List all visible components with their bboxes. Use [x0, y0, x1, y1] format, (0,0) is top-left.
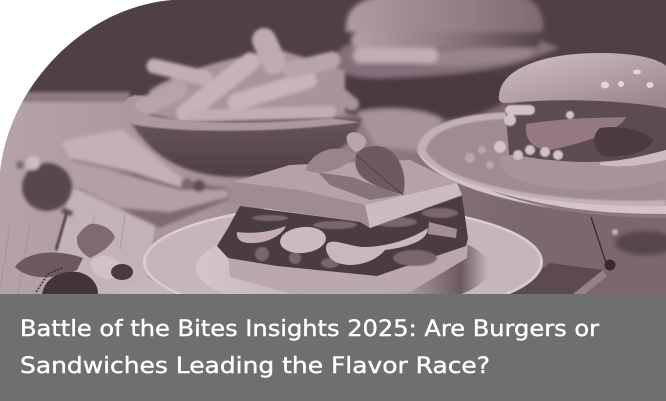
cheese and mushroom slices: [237, 226, 286, 243]
front right burger: [465, 53, 666, 190]
dark backdrop: [0, 0, 666, 100]
front sandwich: [217, 160, 468, 294]
cutting board: [63, 129, 232, 228]
front plate: [116, 208, 543, 294]
bottom bread: [228, 243, 468, 294]
top bread: [228, 164, 422, 228]
right plate: [417, 112, 666, 218]
title: Battle of the Bites Insights 2025: Are Burgers or: [20, 316, 600, 342]
title: Sandwiches Leading the Flavor Race?: [20, 353, 490, 379]
back burger on dark plate: [320, 0, 560, 152]
bowl of fries: [121, 40, 362, 177]
title band: [0, 294, 666, 401]
strawberry, left: [16, 156, 72, 214]
basil garnish: [305, 132, 405, 200]
decorative leaves and berry: [15, 224, 133, 294]
wooden table: [0, 92, 666, 294]
photo: burgers and sandwiches on a table: [0, 0, 666, 320]
filling: [217, 196, 468, 276]
title: [20, 316, 600, 379]
